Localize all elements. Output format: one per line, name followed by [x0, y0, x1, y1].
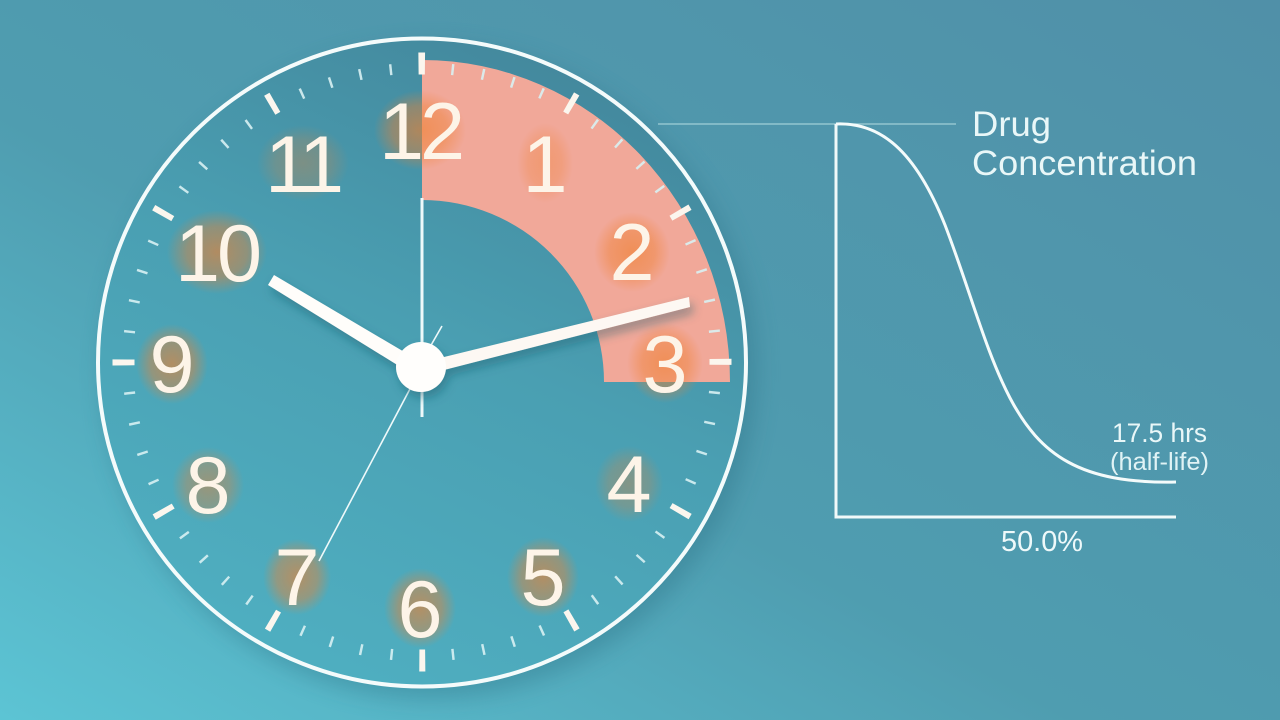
clock numbers: 9: [149, 320, 195, 410]
hour hand: [268, 275, 406, 366]
clock numbers: 5: [520, 533, 566, 623]
clock numbers: 2: [609, 208, 655, 298]
clock numbers: 7: [274, 533, 320, 623]
connector line: [658, 123, 956, 125]
second hand and thin pointers: [319, 198, 442, 561]
chart title: Drug: [972, 105, 1051, 144]
clock: [98, 38, 756, 698]
clock hands: [268, 275, 690, 392]
clock numbers: 4: [606, 440, 652, 530]
drug concentration chart: [836, 105, 1209, 558]
half-life value: 17.5 hrs: [1112, 418, 1207, 448]
clock numbers: 3: [642, 320, 688, 410]
clock numbers: 1: [522, 120, 568, 210]
number glows: [136, 90, 703, 648]
minute hand: [440, 297, 690, 370]
chart axes: [836, 124, 1176, 517]
hour ticks: [124, 64, 720, 660]
half-life note: (half-life): [1110, 448, 1209, 476]
highlighted quarter wedge: [422, 60, 730, 382]
chart title: Concentration: [972, 144, 1197, 183]
minute ticks: [128, 68, 716, 656]
clock numbers: 11: [265, 120, 341, 210]
center hub: [396, 342, 446, 392]
clock shadow: [104, 46, 756, 698]
clock numbers: 10: [175, 209, 259, 299]
clock numbers: [149, 87, 688, 655]
clock face: [98, 38, 746, 686]
clock numbers: 8: [185, 441, 231, 531]
percent label: 50.0%: [1001, 526, 1083, 558]
concentration curve: [836, 124, 1176, 482]
clock numbers: 12: [379, 87, 461, 177]
clock numbers: 6: [397, 565, 443, 655]
